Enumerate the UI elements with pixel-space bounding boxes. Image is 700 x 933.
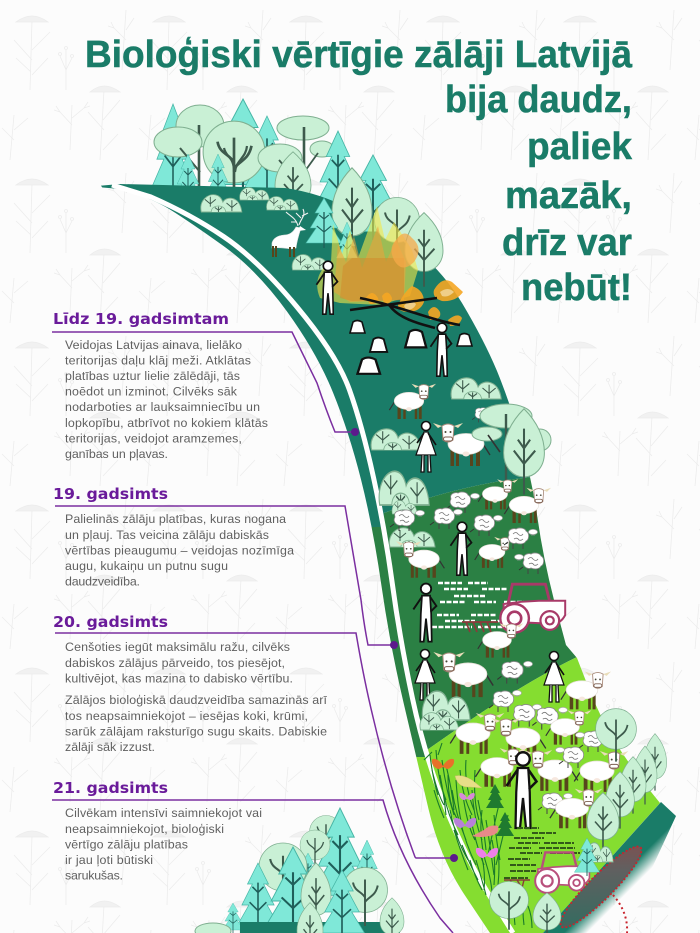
- meadow: trees on right edge: [587, 709, 667, 852]
- text block: kultivējot, kas mazina to dabisko vērtību.: [65, 672, 293, 686]
- forest-edge grazing group: [371, 378, 551, 495]
- main curved band with three coloured zones: [101, 184, 660, 933]
- title: Bioloģiski vērtīgie zālāji Latvijā: [85, 34, 633, 76]
- text block: tos neapsaimniekojot – iesējas koki, krūmi,: [65, 709, 308, 723]
- title: mazāk,: [505, 175, 632, 217]
- text block: vērtības pieaugumu – veidojas nozīmīga: [65, 544, 294, 558]
- meadow: ploughed field rows: [504, 828, 580, 878]
- bottom forest: [195, 808, 404, 933]
- heading: 21. gadsimts: [53, 779, 168, 797]
- connector: [55, 506, 394, 645]
- icon: large person in meadow: [506, 752, 536, 828]
- text block: [65, 512, 294, 588]
- icon: white deer: [272, 209, 308, 257]
- pasture: bushes and herd: [379, 471, 551, 578]
- text block: augu, kukaiņu un putnu sugu: [65, 559, 228, 573]
- heading: Līdz 19. gadsimtam: [53, 310, 229, 328]
- text block: [65, 806, 262, 882]
- text block: lopkopību, atbrīvot no kokiem klātās: [65, 416, 268, 430]
- title: nebūt!: [521, 267, 632, 309]
- title: bija daudz,: [445, 79, 632, 121]
- text block: vērtīgo zālāju platības: [65, 838, 188, 852]
- icon: man ploughing: [413, 584, 436, 642]
- text block: zālāji sāk izzust.: [65, 740, 155, 754]
- text block: Zālājos bioloģiskā daudzveidība samazinās arī: [65, 693, 328, 707]
- connector: [52, 332, 355, 432]
- text block: [65, 338, 268, 461]
- text block: teritorijas daļu klāj meži. Atklātas: [65, 354, 251, 368]
- text block: sarūk zālājam raksturīgo sugu skaits. Dabiskie: [65, 724, 327, 738]
- text block: Veidojas Latvijas ainava, lielāko: [65, 338, 242, 352]
- forest on the band: right part before the fire: [201, 155, 443, 287]
- meadow: grass and wildflowers: [424, 743, 532, 928]
- title: [85, 34, 633, 309]
- heading: 20. gadsimts: [53, 613, 168, 631]
- text block: un pļauj. Tas veicina zālāju dabiskās: [65, 528, 269, 542]
- pasture-meadow boundary: herd: [415, 623, 564, 730]
- text block: Cilvēkam intensīvi saimniekojot vai: [65, 806, 262, 820]
- timeline: 21. gadsimts: [52, 779, 453, 933]
- zone: pasture, dark green: [372, 477, 576, 757]
- connector: [55, 633, 454, 858]
- icon: pink tractor with plough: [504, 852, 589, 893]
- top forest: trees behind the band: [152, 99, 361, 218]
- text block: [65, 640, 328, 754]
- dot: [390, 641, 398, 649]
- bottom teal edge with fade: [543, 802, 676, 933]
- birds and butterflies: [432, 759, 498, 858]
- text block: neapsaimniekojot, bioloģiski: [65, 822, 224, 836]
- icon: person standing among stumps: [430, 323, 451, 376]
- text block: noēdot un izminot. Cilvēks sāk: [65, 384, 238, 398]
- zone: forest, teal: [101, 184, 530, 527]
- text block: dabiskos zālājus pārveido, tos piesējot,: [65, 656, 285, 670]
- text block: platības uztur lielie zālēdāji, tās: [65, 369, 240, 383]
- white stripe along band: [112, 185, 513, 933]
- meadow: small conifers, bushes: [486, 784, 613, 933]
- timeline: 20. gadsimts: [53, 613, 458, 862]
- text block: teritorijas, veidojot aramzemes,: [65, 432, 242, 446]
- title: paliek: [527, 126, 633, 168]
- exposed soil ellipse with red dotted outline: [553, 839, 649, 933]
- fire: [317, 206, 463, 326]
- timeline: 19. gadsimts: [53, 485, 398, 649]
- dot: [351, 428, 359, 436]
- meadow: herd and sheep: [450, 672, 628, 828]
- timeline: Līdz 19. gadsimtam: [52, 310, 359, 461]
- text block: sarukušas.: [65, 868, 123, 882]
- fallen burning logs: [350, 298, 460, 328]
- text block: Cenšoties iegūt maksimālu ražu, cilvēks: [65, 640, 290, 654]
- text block: Palielinās zālāju platības, kuras nogana: [65, 512, 286, 526]
- tree stumps: [350, 320, 472, 374]
- text block: nodarboties ar lauksaimniecību un: [65, 400, 260, 414]
- heading: 19. gadsimts: [53, 485, 168, 503]
- text block: ir jau ļoti būtiski: [65, 853, 153, 867]
- ploughed field, dark zone: [432, 583, 524, 627]
- icon: person with torch: [316, 261, 337, 314]
- zone: meadow, light green: [416, 657, 660, 933]
- dot: [450, 854, 458, 862]
- title: drīz var: [502, 222, 632, 264]
- text block: ganības un pļavas.: [65, 447, 168, 461]
- icon: tractor with plough: [462, 584, 565, 633]
- text block: daudzveidība.: [65, 574, 140, 588]
- connector: [52, 800, 453, 933]
